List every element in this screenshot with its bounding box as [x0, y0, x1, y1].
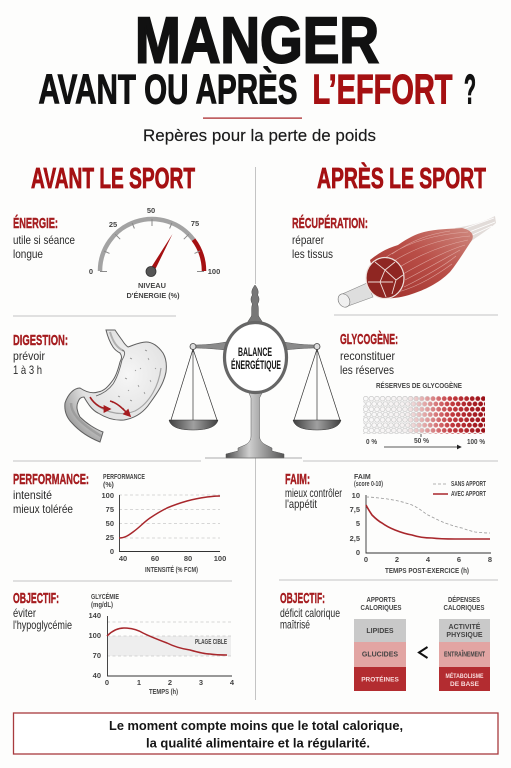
callout: la qualité alimentaire et la régularité.: [146, 736, 370, 750]
faim text: [285, 471, 342, 511]
objectif text: maîtrisé: [280, 618, 310, 632]
hunger line chart: 0: [364, 555, 368, 564]
finial: [247, 285, 263, 323]
glycogène text: reconstituer: [340, 349, 395, 363]
digestion text: prévoir: [13, 349, 45, 363]
panel: objectif déficit: [280, 590, 490, 691]
hunger line chart: (score 0-10): [354, 481, 383, 488]
digestion text: DIGESTION:: [13, 332, 68, 349]
glycogen dot chart: 100 %: [467, 439, 486, 446]
panel: objectif glycémie: [13, 590, 235, 696]
title: AVANT OU APRÈS: [38, 66, 298, 112]
glycemia line chart: 70: [93, 651, 101, 660]
balance label: ÉNERGÉTIQUE: [231, 359, 281, 372]
calorie expenditure column: ENTRAÎNEMENT: [444, 650, 486, 658]
calorie expenditure column: PHYSIQUE: [446, 632, 483, 639]
gauge chart: [89, 206, 220, 300]
glycogen dot chart: 50 %: [414, 438, 430, 445]
récupération text: RÉCUPÉRATION:: [292, 215, 368, 232]
performance line chart: 0: [110, 547, 114, 556]
right pan: [293, 344, 341, 430]
objectif text: [13, 590, 72, 632]
hunger line chart: 10: [352, 491, 360, 500]
calorie expenditure column: MÉTABOLISME: [446, 671, 484, 680]
glycemia line chart: TEMPS (h): [149, 689, 178, 696]
énergie text: longue: [13, 247, 43, 261]
hunger line chart: [350, 474, 492, 575]
callout: [14, 713, 498, 754]
glycogène text: GLYCOGÈNE:: [340, 331, 398, 348]
balance label: [231, 347, 281, 372]
digestion text: [13, 332, 68, 377]
hunger line chart: 8: [488, 555, 492, 564]
performance line chart: 100: [214, 554, 226, 563]
callout: Le moment compte moins que le total calorique,: [109, 718, 403, 733]
gauge chart: 100: [208, 267, 220, 276]
hunger line chart: 2: [395, 555, 399, 564]
performance text: PERFORMANCE:: [13, 471, 89, 488]
text: ?: [464, 66, 476, 112]
faim text: FAIM:: [285, 471, 310, 488]
performance line chart: INTENSITÉ (% FCM): [145, 565, 198, 574]
calorie intake column: LIPIDES: [366, 628, 394, 635]
calorie expenditure column: DÉPENSES: [448, 595, 480, 604]
title: [38, 4, 476, 112]
hunger line chart: 2,5: [350, 534, 360, 543]
digestion text: 1 à 3 h: [13, 363, 42, 377]
glycemia line chart: 0: [105, 678, 109, 687]
calorie expenditure column: ACTIVITÉ: [449, 622, 481, 631]
heading: avant le sport: AVANT LE SPORT: [31, 163, 195, 195]
hunger line chart: 7,5: [350, 505, 360, 514]
glycemia line chart: PLAGE CIBLE: [195, 639, 227, 646]
glycogène text: [340, 331, 398, 377]
calorie intake column: [354, 597, 406, 691]
objectif text: l'hypoglycémie: [13, 618, 72, 632]
glycemia line chart: [88, 592, 235, 696]
performance line chart: PERFORMANCE: [103, 474, 145, 481]
performance line chart: [101, 474, 226, 574]
subtitle: Repères pour la perte de poids: [143, 127, 376, 145]
hunger line chart: TEMPS POST-EXERCICE (h): [385, 568, 469, 575]
less-than sign: [419, 647, 428, 658]
balance disc: [224, 322, 286, 392]
performance line chart: 50: [106, 519, 114, 528]
icon: balance scale: [169, 285, 341, 458]
hunger line chart: 4: [426, 555, 431, 564]
performance line chart: 60: [151, 554, 159, 563]
title: L’EFFORT: [312, 66, 453, 112]
objectif text: OBJECTIF:: [13, 590, 59, 607]
performance text: mieux tolérée: [13, 502, 73, 516]
legend: [433, 481, 486, 498]
glycemia line chart: GLYCÉMIE: [91, 592, 119, 601]
legend: AVEC APPORT: [451, 491, 486, 498]
calorie intake column: GLUCIDES: [362, 652, 398, 658]
gauge chart: 0: [89, 267, 93, 276]
performance line chart: 25: [106, 533, 114, 542]
panel: performance: [13, 471, 226, 574]
hunger line chart: 5: [356, 519, 360, 528]
glycogen dot chart: 0 %: [366, 439, 378, 446]
panel: digestion: [13, 330, 166, 442]
objectif text: éviter: [13, 606, 36, 620]
objectif text: [280, 590, 340, 632]
performance line chart: 100: [101, 491, 114, 500]
beam: [193, 342, 317, 350]
glycemia line chart: 140: [88, 611, 101, 620]
objectif text: OBJECTIF:: [280, 590, 325, 607]
énergie text: ÉNERGIE:: [13, 215, 58, 232]
gauge chart: 50: [147, 206, 155, 215]
performance line chart: 80: [184, 554, 192, 563]
gauge chart: 25: [109, 220, 117, 229]
panel: récupération: [292, 215, 496, 309]
glycemia line chart: 1: [137, 678, 141, 687]
calorie intake column: CALORIQUES: [360, 605, 402, 612]
stem and base: [226, 393, 284, 458]
calorie expenditure column: DE BASE: [450, 681, 480, 688]
glycemia line chart: 40: [93, 671, 101, 680]
icon: stomach: [65, 330, 166, 442]
hunger line chart: FAIM: [354, 474, 371, 481]
récupération text: les tissus: [292, 247, 333, 261]
title: MANGER: [135, 4, 379, 76]
balance label: BALANCE: [238, 347, 272, 359]
calorie expenditure column: [439, 595, 490, 691]
gauge chart: NIVEAU: [138, 283, 166, 290]
calorie expenditure column: CALORIQUES: [444, 605, 485, 612]
glycemia line chart: 3: [199, 678, 203, 687]
panel: glycogène: [340, 331, 486, 447]
performance text: [13, 471, 89, 516]
gauge chart: D'ÉNERGIE (%): [126, 291, 180, 300]
glycemia line chart: 4: [230, 678, 235, 687]
calorie intake column: APPORTS: [366, 597, 396, 604]
gauge chart: 75: [191, 219, 199, 228]
énergie text: [13, 215, 75, 261]
performance line chart: (%): [103, 482, 114, 489]
icon: muscle: [336, 216, 496, 309]
performance line chart: 40: [119, 554, 127, 563]
faim text: mieux contrôler: [285, 486, 342, 500]
récupération text: [292, 215, 368, 261]
left pan: [169, 344, 218, 430]
calorie intake column: PROTÉINES: [361, 674, 399, 684]
hunger line chart: 6: [457, 555, 461, 564]
glycogène text: les réserves: [340, 363, 394, 377]
glycogen dot chart: RÉSERVES DE GLYCOGÈNE: [376, 381, 462, 390]
faim text: l'appétit: [285, 497, 318, 511]
glycemia line chart: 2: [168, 678, 172, 687]
glycogen dot chart: [363, 381, 486, 447]
récupération text: réparer: [292, 233, 324, 247]
glycemia line chart: 100: [88, 631, 101, 640]
panel: énergie: [13, 206, 220, 300]
performance text: intensité: [13, 488, 52, 502]
panel: faim: [285, 471, 492, 575]
performance line chart: 75: [106, 505, 114, 514]
hunger line chart: 0: [356, 548, 360, 557]
glycemia line chart: (mg/dL): [91, 602, 113, 609]
énergie text: utile si séance: [13, 233, 75, 247]
objectif text: déficit calorique: [280, 606, 340, 620]
legend: SANS APPORT: [451, 481, 486, 488]
